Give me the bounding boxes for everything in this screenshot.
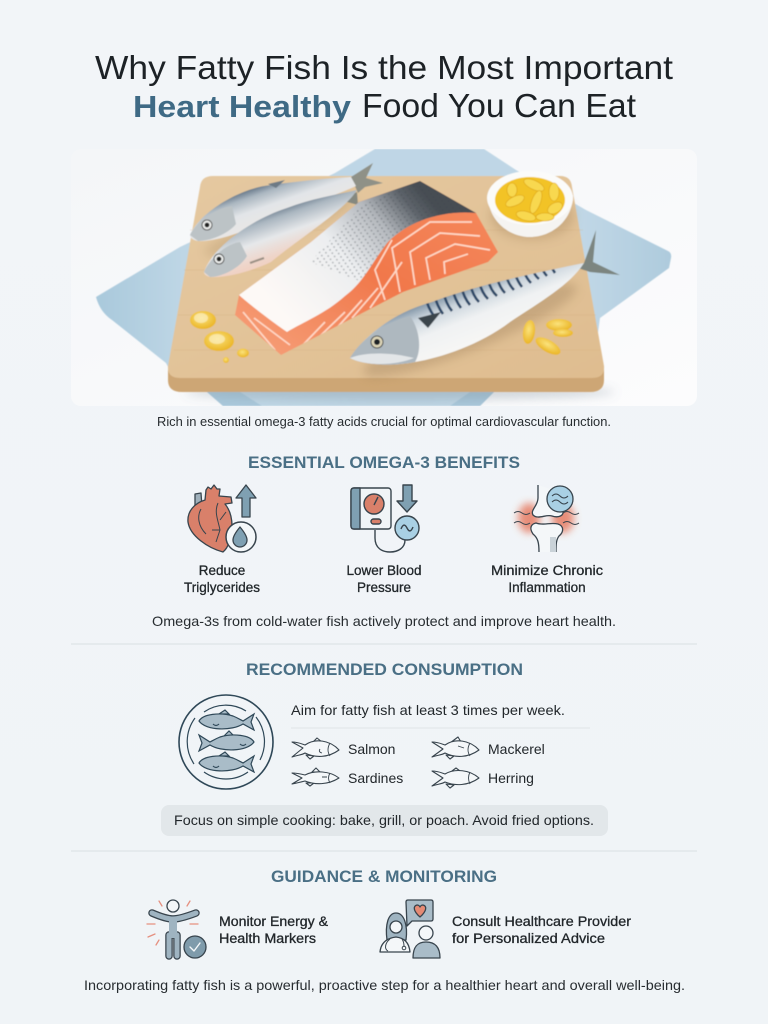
heading: essential omega-3 benefits: ESSENTIAL OMEGA-3 BENEFITS xyxy=(248,453,520,472)
icon: person with check mark xyxy=(147,900,206,958)
oil drops xyxy=(190,311,249,363)
sardine bottom xyxy=(204,190,358,277)
fish: herring: Herring xyxy=(488,770,534,786)
capsules xyxy=(521,319,573,358)
icon: plate of three fish xyxy=(179,695,273,789)
fish: salmon xyxy=(292,738,395,759)
photo caption: Rich in essential omega-3 fatty acids crucial for optimal cardiovascular function. xyxy=(157,414,611,429)
label: Lower Blood xyxy=(346,563,422,578)
heading: guidance and monitoring: GUIDANCE & MONITORING xyxy=(271,867,497,886)
icon: inflamed joint xyxy=(514,485,579,552)
icon: heart with arrow and drop xyxy=(188,485,256,552)
closing statement: Incorporating fatty fish is a powerful, proactive step for a healthier heart and overall well-being. xyxy=(84,977,685,993)
sardine top xyxy=(190,163,383,266)
fish: sardines: Sardines xyxy=(348,770,403,786)
benefit: reduce triglycerides xyxy=(184,485,260,595)
fish: herring xyxy=(432,768,534,788)
bowl of omega-3 capsules xyxy=(487,171,574,240)
blue linen cloth xyxy=(96,149,671,406)
cutting board xyxy=(168,176,615,400)
icon: doctor and patient with heart speech bubble xyxy=(380,900,440,958)
fish: mackerel xyxy=(432,737,545,759)
title: Food You Can Eat xyxy=(362,87,636,124)
fish: sardines xyxy=(292,768,403,786)
recommendation text: Aim for fatty fish at least 3 times per week. xyxy=(291,702,565,718)
benefits summary: Omega-3s from cold-water fish actively protect and improve heart health. xyxy=(152,613,616,629)
photo: fish on a cutting board xyxy=(71,149,697,406)
benefit: lower blood pressure: Pressure xyxy=(357,580,411,595)
guidance: consult healthcare provider xyxy=(380,900,632,958)
fish: mackerel: Mackerel xyxy=(488,741,545,757)
callout: cooking advice: Focus on simple cooking: bake, grill, or poach. Avoid fried options. xyxy=(174,812,594,828)
benefit: minimize chronic inflammation: Inflammation xyxy=(508,580,586,595)
fish: salmon: Salmon xyxy=(348,741,395,757)
benefit: minimize chronic inflammation xyxy=(491,485,603,595)
label: Minimize Chronic xyxy=(491,563,603,578)
icon: blood pressure monitor xyxy=(351,485,419,552)
guidance: consult healthcare provider: for Personalized Advice xyxy=(452,931,605,946)
benefit: lower blood pressure xyxy=(346,485,422,595)
label: Reduce xyxy=(199,563,245,578)
mackerel xyxy=(350,230,620,392)
guidance: monitor energy xyxy=(147,900,328,958)
benefit: reduce triglycerides: Triglycerides xyxy=(184,580,260,595)
label: Monitor Energy & xyxy=(219,914,328,929)
title: Why Fatty Fish Is the Most Important xyxy=(95,49,673,86)
title: Heart Healthy xyxy=(133,89,352,124)
guidance: monitor energy: Health Markers xyxy=(219,931,316,946)
callout: cooking advice xyxy=(161,805,608,836)
heading: recommended consumption: RECOMMENDED CONSUMPTION xyxy=(246,660,523,679)
title xyxy=(95,49,673,124)
label: Consult Healthcare Provider xyxy=(452,914,632,929)
salmon fillet xyxy=(232,181,498,355)
